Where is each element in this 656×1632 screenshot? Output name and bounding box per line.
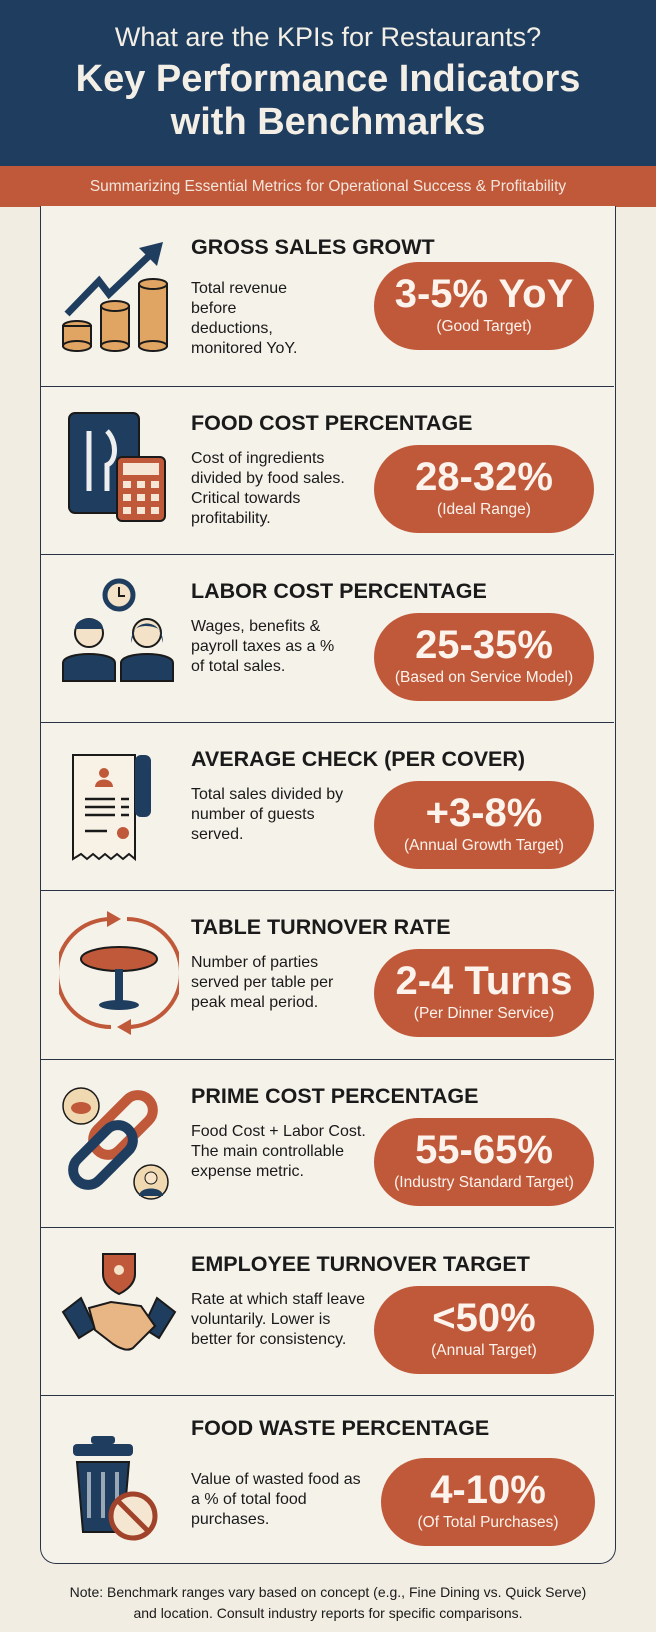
benchmark pill: [374, 1118, 594, 1206]
description: Number of parties served per table per peak meal period.: [191, 954, 333, 1011]
benchmark pill: [374, 262, 594, 350]
benchmark pill: 25-35%: [415, 623, 553, 667]
benchmark pill: (Based on Service Model): [395, 669, 573, 686]
description: Total sales divided by number of guests served.: [191, 786, 343, 843]
panel: food waste: [73, 1416, 595, 1546]
footnote: Note: Benchmark ranges vary based on concept (e.g., Fine Dining vs. Quick Serve): [70, 1584, 586, 1600]
benchmark pill: (Industry Standard Target): [394, 1174, 574, 1191]
benchmark pill: (Of Total Purchases): [418, 1514, 558, 1531]
icon: receipt: [72, 754, 151, 861]
heading: LABOR COST PERCENTAGE: [191, 579, 487, 603]
subtitle question: What are the KPIs for Restaurants?: [115, 22, 541, 52]
panel: food cost: [41, 387, 614, 555]
main title: [76, 58, 580, 143]
icon: staff and clock: [62, 578, 174, 682]
benchmark pill: 55-65%: [415, 1128, 553, 1172]
panel: gross sales: [41, 206, 614, 387]
benchmark pill: [381, 1458, 595, 1546]
benchmark pill: [374, 1286, 594, 1374]
benchmark pill: (Per Dinner Service): [414, 1005, 554, 1022]
description: Cost of ingredients divided by food sales. Critical towards profitability.: [191, 450, 345, 527]
heading: PRIME COST PERCENTAGE: [191, 1084, 478, 1108]
footnote: [70, 1584, 586, 1621]
description: Food Cost + Labor Cost. The main controllable expense metric.: [191, 1123, 366, 1180]
icon: trash can with no-food sign: [73, 1436, 158, 1540]
heading: GROSS SALES GROWT: [191, 235, 435, 259]
benchmark pill: [374, 613, 594, 701]
description: Value of wasted food as a % of total food purchases.: [191, 1471, 361, 1528]
footnote: and location. Consult industry reports for specific comparisons.: [133, 1605, 523, 1621]
main title: with Benchmarks: [171, 101, 485, 143]
benchmark pill: <50%: [432, 1296, 536, 1340]
benchmark pill: 3-5% YoY: [395, 272, 573, 316]
benchmark pill: (Annual Growth Target): [404, 837, 564, 854]
panel: employee turnover: [41, 1228, 614, 1396]
tagline band: [0, 166, 656, 207]
benchmark pill: [374, 781, 594, 869]
main title: Key Performance Indicators: [76, 58, 580, 100]
benchmark pill: 28-32%: [415, 455, 553, 499]
benchmark pill: 4-10%: [430, 1468, 546, 1512]
icon: handshake with shield: [62, 1253, 176, 1351]
benchmark pill: 2-4 Turns: [395, 959, 573, 1003]
heading: FOOD WASTE PERCENTAGE: [191, 1416, 489, 1440]
icon: menu and calculator: [68, 412, 166, 522]
description: Rate at which staff leave voluntarily. Lower is better for consistency.: [191, 1291, 365, 1348]
panel: average check: [41, 723, 614, 891]
panel: table turnover: [41, 891, 614, 1060]
benchmark pill: (Good Target): [436, 318, 532, 335]
benchmark pill: [374, 949, 594, 1037]
icon: coins with arrow: [62, 242, 168, 352]
icon: table with circular arrows: [59, 911, 179, 1035]
heading: FOOD COST PERCENTAGE: [191, 411, 473, 435]
panel: labor cost: [41, 555, 614, 723]
description: Wages, benefits & payroll taxes as a % of total sales.: [191, 618, 334, 675]
panel: prime cost: [41, 1060, 614, 1228]
heading: EMPLOYEE TURNOVER TARGET: [191, 1252, 530, 1276]
benchmark pill: +3-8%: [426, 791, 542, 835]
description: Total revenue before deductions, monitored YoY.: [191, 280, 297, 357]
benchmark pill: [374, 445, 594, 533]
tagline band: Summarizing Essential Metrics for Operational Success & Profitability: [90, 178, 566, 195]
header: [0, 0, 656, 166]
heading: TABLE TURNOVER RATE: [191, 915, 451, 939]
benchmark pill: (Annual Target): [431, 1342, 537, 1359]
icon: chain links: [62, 1087, 169, 1200]
card: KPI list: [40, 206, 616, 1564]
heading: AVERAGE CHECK (PER COVER): [191, 747, 525, 771]
benchmark pill: (Ideal Range): [437, 501, 531, 518]
